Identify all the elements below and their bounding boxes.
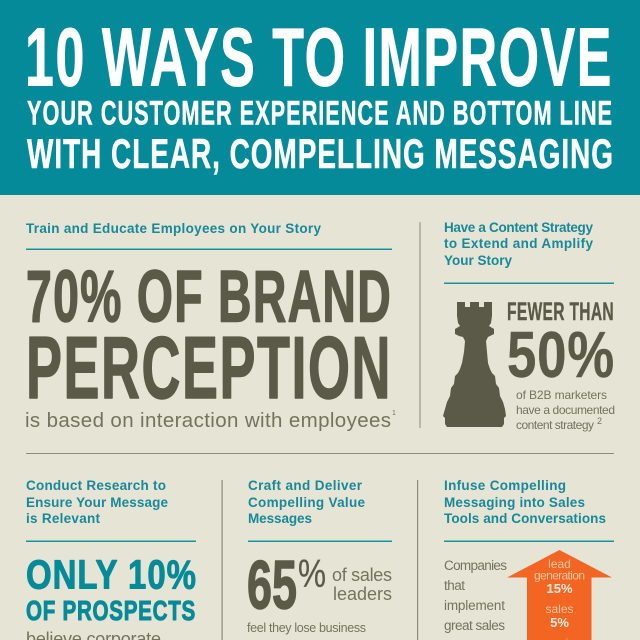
panel: sales tools: great sales — [444, 618, 505, 633]
icon: chess rook — [443, 302, 506, 427]
heading: Train and Educate Employees on Your Story — [26, 221, 321, 236]
panel: sales tools: implement — [444, 598, 505, 613]
panel: sales tools — [444, 478, 614, 640]
heading: Infuse Compelling — [444, 478, 566, 493]
caption: feel they lose business — [247, 621, 366, 635]
of sales leaders: of sales — [332, 565, 392, 585]
panel: content strategy: to Extend and Amplify — [444, 236, 593, 251]
heading: Have a Content Strategy — [444, 220, 593, 235]
icon: orange up arrow: lead — [548, 557, 571, 571]
icon: orange up arrow: generation — [534, 568, 585, 582]
heading: Conduct Research to — [26, 478, 166, 493]
big statistic line 2: PERCEPTION — [26, 318, 392, 417]
caption: of B2B marketers — [516, 388, 607, 402]
50 percent: 50% — [507, 318, 615, 391]
body text: Companies — [444, 558, 507, 573]
panel: content strategy — [443, 220, 615, 432]
icon: orange up arrow: 5% — [550, 615, 569, 630]
panel: value messages: Messages — [248, 511, 312, 526]
icon: orange up arrow — [507, 550, 612, 640]
65: 65 — [247, 546, 297, 624]
heading: Craft and Deliver — [248, 478, 363, 493]
panel: value messages — [247, 478, 392, 635]
panel: train employees — [25, 221, 396, 432]
panel: content strategy: have a documented — [516, 403, 615, 417]
panel: sales tools: Tools and Conversations — [444, 511, 606, 526]
of prospects: OF PROSPECTS — [26, 595, 196, 626]
only 10 percent: ONLY 10% — [26, 552, 197, 598]
caption: is based on interaction with employees — [25, 409, 391, 432]
footnote marker: 1 — [392, 410, 396, 417]
panel: value messages: Compelling Value — [248, 495, 365, 510]
header banner — [0, 0, 640, 195]
panel: value messages: leaders — [333, 584, 392, 604]
panel: research — [26, 478, 197, 640]
panel: research: is Relevant — [26, 511, 100, 526]
panel: research: Ensure Your Message — [26, 495, 168, 510]
icon: orange up arrow: 15% — [546, 581, 573, 596]
panel: sales tools: that — [444, 578, 465, 593]
panel: content strategy: Your Story — [444, 253, 512, 268]
icon: orange up arrow: sales — [545, 602, 574, 616]
panel: content strategy: 2 — [597, 416, 602, 426]
divider top — [420, 222, 421, 428]
panel: sales tools: Messaging into Sales — [444, 495, 585, 510]
panel: content strategy: content strategy — [516, 418, 594, 432]
big statistic line 1: 70% OF BRAND — [26, 256, 392, 338]
percent sign: % — [298, 553, 326, 596]
